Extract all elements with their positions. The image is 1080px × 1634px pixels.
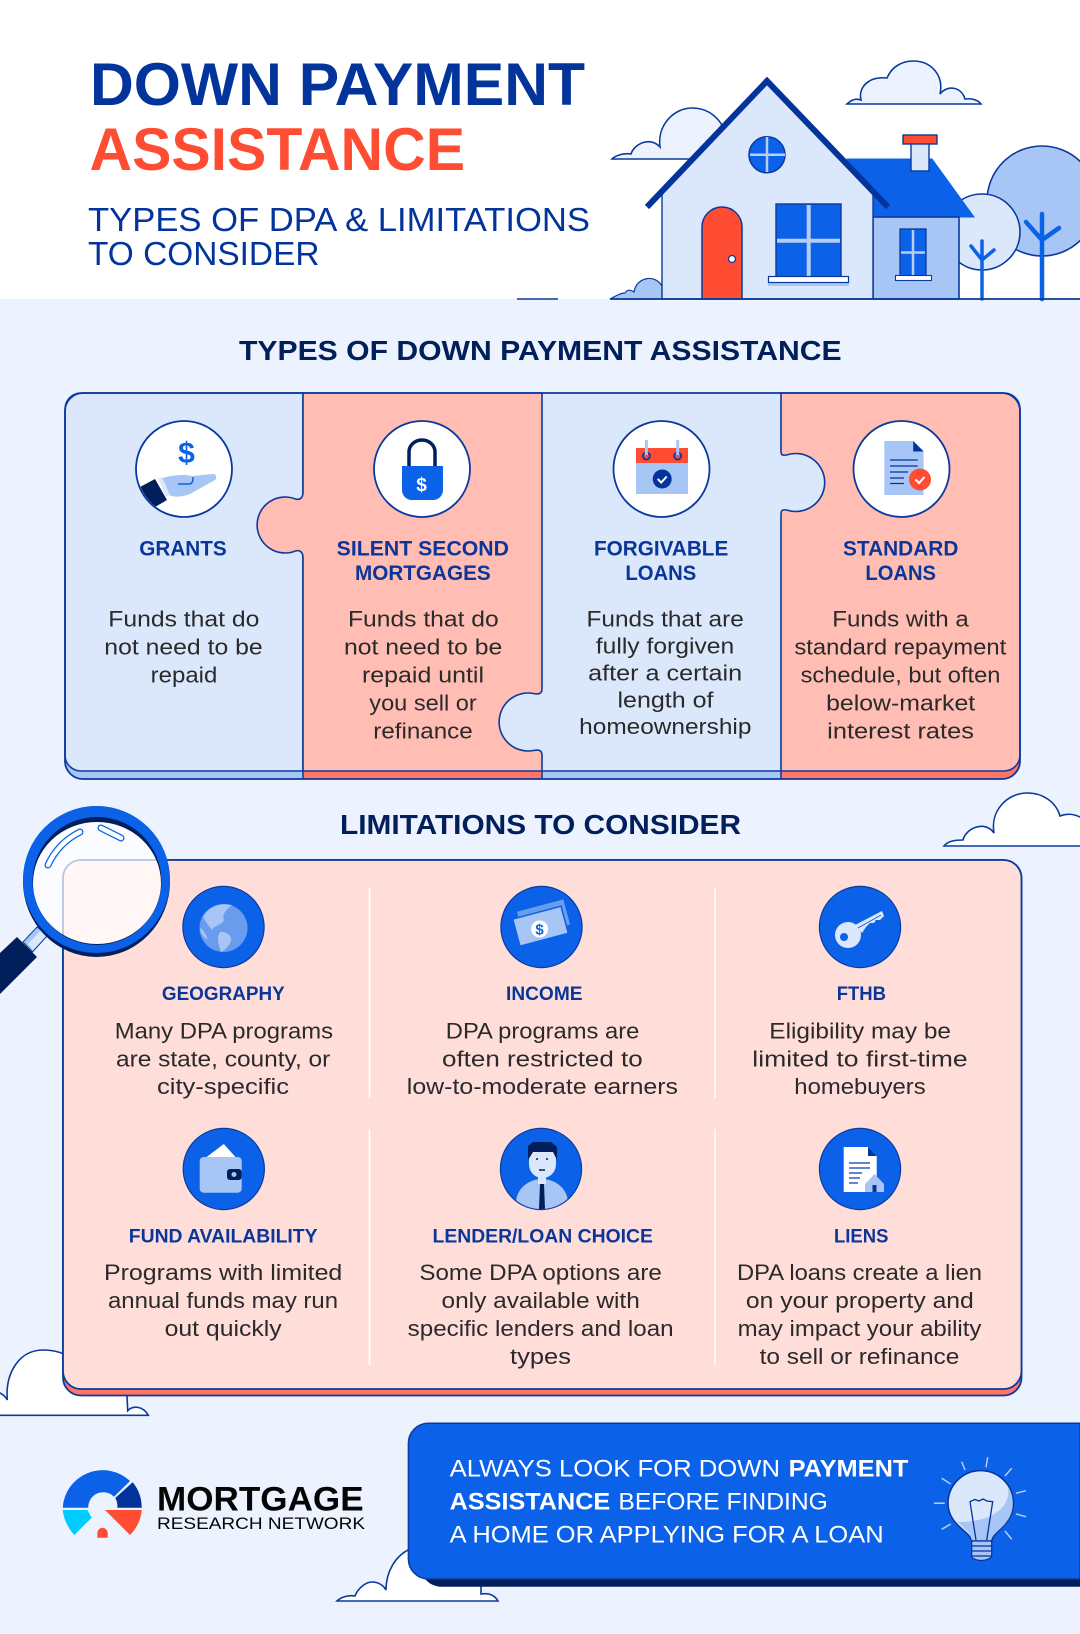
card: standard loans: STANDARD	[843, 538, 958, 561]
card: standard loans: LOANS	[865, 562, 936, 585]
item: income: low-to-moderate earners	[407, 1074, 678, 1099]
callout: always look for down payment assistance: BEFORE FINDING	[618, 1488, 828, 1515]
item: geography	[115, 886, 333, 1099]
icon: light bulb	[934, 1457, 1026, 1560]
card: standard loans: schedule, but often	[801, 663, 1000, 688]
logo: mortgage research network	[63, 1470, 366, 1538]
card: forgivable loans: homeownership	[579, 714, 751, 739]
item: fund availability: annual funds may run	[108, 1288, 338, 1313]
item: lender/loan choice: specific lenders and loan	[408, 1316, 674, 1341]
logo: mortgage research network: RESEARCH NETWORK	[157, 1514, 366, 1533]
item: geography: are state, county, or	[116, 1046, 331, 1071]
item: fund availability: out quickly	[165, 1316, 283, 1341]
card: forgivable loans	[579, 421, 751, 739]
item: fund availability: Programs with limited	[104, 1260, 342, 1285]
panel: limitations	[63, 860, 1022, 1396]
card: forgivable loans: FORGIVABLE	[594, 538, 728, 561]
item: lender/loan choice: Some DPA options are	[419, 1260, 662, 1285]
card: standard loans: below-market	[826, 691, 976, 716]
card: standard loans: Funds with a	[832, 607, 969, 632]
cloud: right of limitations heading	[944, 793, 1080, 846]
item: income: INCOME	[506, 984, 582, 1005]
item: FTHB: homebuyers	[794, 1074, 926, 1099]
item: geography: GEOGRAPHY	[162, 984, 285, 1005]
item: FTHB	[752, 886, 968, 1099]
item: liens: on your property and	[746, 1288, 974, 1313]
title: DOWN PAYMENT	[90, 51, 585, 118]
card: silent second mortgages: SILENT SECOND	[337, 538, 509, 561]
item: geography: Many DPA programs	[115, 1018, 333, 1043]
card: forgivable loans: Funds that are	[586, 607, 744, 632]
panel: types of assistance puzzle	[65, 393, 1020, 779]
item: liens	[737, 1128, 982, 1369]
item: liens: DPA loans create a lien	[737, 1260, 982, 1285]
card: silent second mortgages: $	[416, 475, 427, 496]
item: income	[407, 886, 678, 1099]
item: liens: may impact your ability	[738, 1316, 982, 1341]
card: silent second mortgages: Funds that do	[348, 607, 499, 632]
card: grants	[104, 421, 263, 688]
card: forgivable loans: after a certain	[588, 661, 742, 686]
cloud: lower left	[0, 1350, 148, 1415]
icon: magnifying glass	[0, 806, 170, 994]
card: grants: repaid	[151, 663, 217, 688]
item: lender/loan choice	[408, 1128, 674, 1369]
card: grants: not need to be	[104, 635, 263, 660]
card: grants: Funds that do	[108, 607, 259, 632]
logo: mortgage research network: MORTGAGE	[157, 1481, 364, 1519]
title	[90, 51, 585, 183]
item: lender/loan choice: only available with	[442, 1288, 640, 1313]
card: silent second mortgages: not need to be	[344, 635, 502, 660]
item: fund availability: FUND AVAILABILITY	[129, 1226, 318, 1247]
item: FTHB: FTHB	[837, 984, 886, 1005]
subtitle: TO CONSIDER	[88, 235, 320, 272]
cloud: bottom	[337, 1549, 498, 1601]
item: FTHB: limited to first-time	[752, 1046, 968, 1071]
subtitle	[88, 201, 590, 272]
item: lender/loan choice: types	[510, 1344, 571, 1369]
card: standard loans	[794, 421, 1007, 744]
callout: always look for down payment assistance: PAYMENT	[789, 1456, 909, 1483]
heading: types of down payment assistance: TYPES OF DOWN PAYMENT ASSISTANCE	[239, 335, 842, 366]
house illustration	[517, 61, 1080, 299]
card: grants: GRANTS	[139, 538, 227, 561]
item: geography: city-specific	[157, 1074, 289, 1099]
card: silent second mortgages: refinance	[373, 719, 473, 744]
callout: always look for down payment assistance: ALWAYS LOOK FOR DOWN	[450, 1456, 780, 1483]
card: silent second mortgages: MORTGAGES	[355, 562, 491, 585]
item: income: $	[535, 922, 544, 938]
callout: always look for down payment assistance	[408, 1423, 1080, 1587]
callout: always look for down payment assistance: ASSISTANCE	[450, 1488, 610, 1515]
item: liens: LIENS	[834, 1226, 888, 1247]
card: grants: $	[178, 437, 195, 470]
card: silent second mortgages	[337, 421, 509, 744]
card: forgivable loans: length of	[618, 687, 714, 712]
card: forgivable loans: fully forgiven	[596, 633, 734, 658]
item: liens: to sell or refinance	[760, 1344, 959, 1369]
card: silent second mortgages: repaid until	[362, 663, 484, 688]
item: lender/loan choice: LENDER/LOAN CHOICE	[432, 1226, 653, 1247]
card: silent second mortgages: you sell or	[369, 691, 477, 716]
callout: always look for down payment assistance: A HOME OR APPLYING FOR A LOAN	[450, 1522, 884, 1549]
card: forgivable loans: LOANS	[625, 562, 696, 585]
item: fund availability	[104, 1128, 342, 1341]
item: FTHB: Eligibility may be	[769, 1018, 951, 1043]
heading: limitations to consider: LIMITATIONS TO CONSIDER	[340, 809, 741, 840]
subtitle: TYPES OF DPA & LIMITATIONS	[88, 201, 590, 238]
card: standard loans: standard repayment	[794, 635, 1007, 660]
item: income: often restricted to	[442, 1046, 643, 1071]
title: ASSISTANCE	[90, 116, 465, 183]
item: income: DPA programs are	[446, 1018, 639, 1043]
card: standard loans: interest rates	[827, 719, 974, 744]
